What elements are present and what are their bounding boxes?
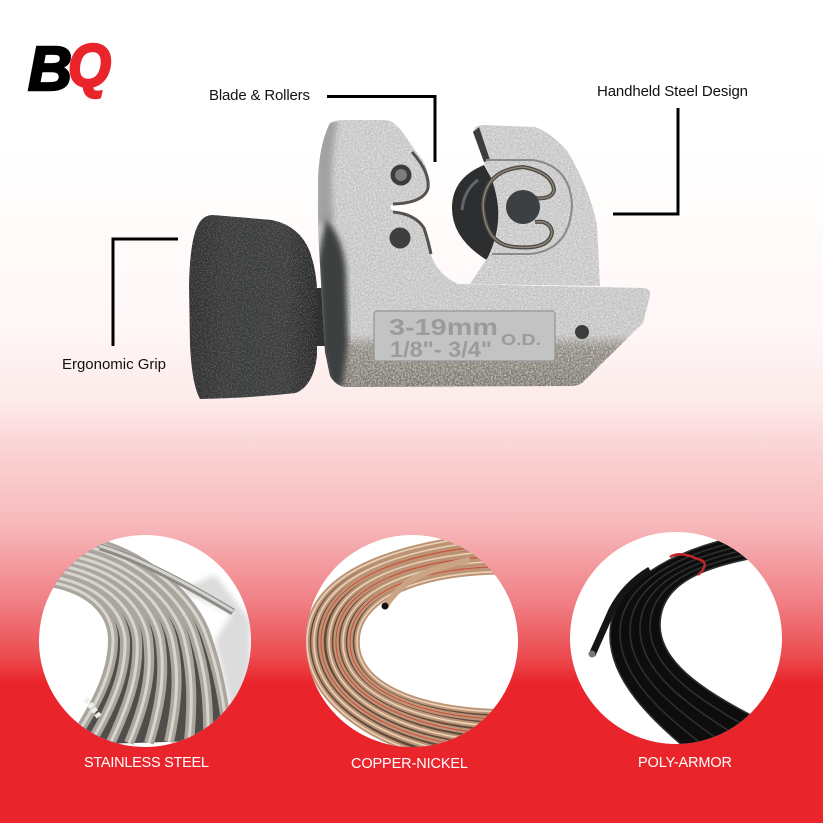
red band xyxy=(670,554,705,575)
spring clip highlight xyxy=(483,167,554,247)
logo: BQ: Q xyxy=(68,32,111,99)
loose tube end xyxy=(100,547,233,612)
label: stainless steel: STAINLESS STEEL xyxy=(84,755,209,771)
small rivet xyxy=(575,325,589,339)
connecting shaft xyxy=(312,288,336,346)
embossed text: 3-19mm xyxy=(389,314,498,340)
coiled copper tubes xyxy=(306,539,495,747)
tube opening xyxy=(382,602,388,610)
callout: Blade & Rollers xyxy=(209,87,435,162)
callout: Blade & Rollers: Blade & Rollers xyxy=(209,87,310,104)
coiled black tubes xyxy=(609,540,750,744)
logo: BQ xyxy=(28,32,111,104)
centre axle xyxy=(506,190,540,224)
loose tube end xyxy=(592,570,650,655)
embossed text: 1/8"- 3/4" xyxy=(390,337,492,362)
tube opening xyxy=(588,650,596,658)
callout: Handheld Steel Design: Handheld Steel Design xyxy=(597,83,748,100)
soft shadow xyxy=(180,575,250,715)
slider top dark notch xyxy=(473,127,490,162)
tube cutter tool xyxy=(189,120,650,399)
white zip tie xyxy=(86,699,100,718)
embossed plate xyxy=(374,311,555,361)
callout: Ergonomic Grip xyxy=(62,239,178,373)
right slider block xyxy=(470,125,600,286)
upper rivet xyxy=(390,164,412,186)
label: poly-armor: POLY-ARMOR xyxy=(638,755,732,771)
label: copper-nickel: COPPER-NICKEL xyxy=(351,756,468,772)
loose tube end xyxy=(385,560,470,607)
upper rivet centre xyxy=(395,169,407,181)
circle background xyxy=(570,532,782,744)
lower roller xyxy=(393,212,431,254)
frame shading xyxy=(316,120,348,388)
coiled steel tubes xyxy=(50,540,228,745)
product: stainless steel xyxy=(39,535,251,747)
cutting wheel xyxy=(452,165,500,262)
spring clip xyxy=(483,167,554,247)
upper roller xyxy=(393,152,428,204)
ergonomic grip knob xyxy=(189,215,317,399)
lower rivet xyxy=(390,228,410,248)
callout: Handheld Steel Design xyxy=(597,83,748,214)
loose tube highlight xyxy=(100,546,233,611)
product: copper-nickel xyxy=(306,535,518,760)
callout: Ergonomic Grip: Ergonomic Grip xyxy=(62,356,166,373)
ring recess xyxy=(486,160,572,254)
circle background xyxy=(306,535,518,747)
logo: BQ: B xyxy=(28,35,72,104)
wheel highlight xyxy=(462,180,478,210)
cutter frame xyxy=(318,120,650,387)
embossed text: O.D. xyxy=(501,332,541,349)
product: poly-armor xyxy=(570,532,782,760)
embossed text xyxy=(389,314,541,362)
circle background xyxy=(39,535,251,747)
